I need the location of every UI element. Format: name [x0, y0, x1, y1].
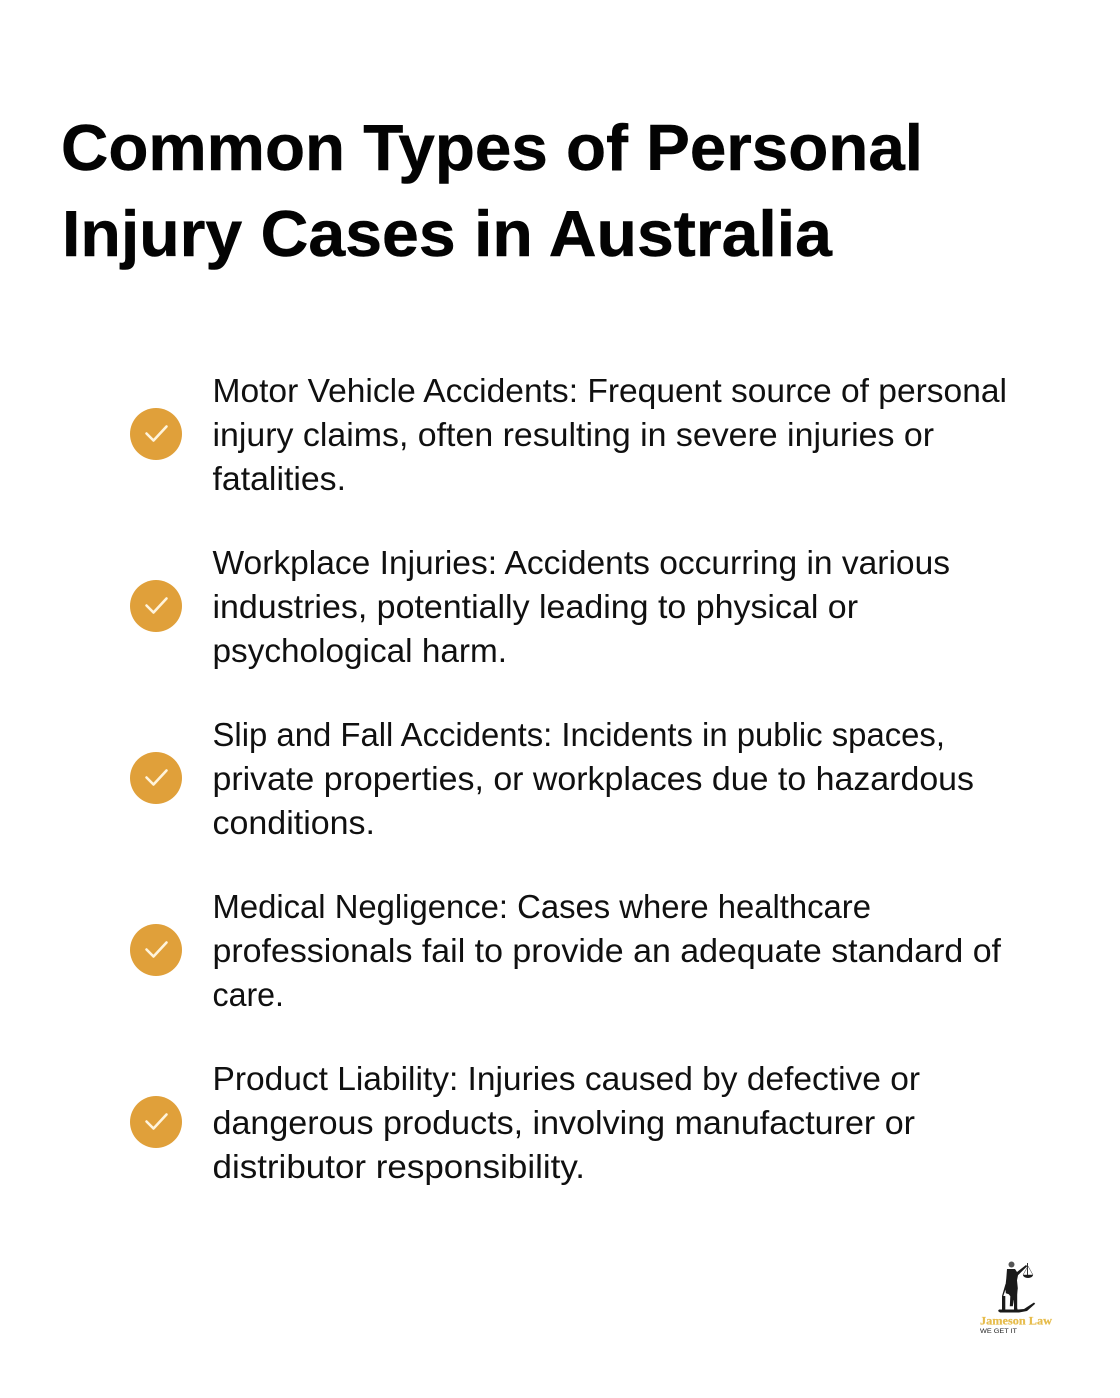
text: motor vehicle accidents: fatalities. — [212, 460, 346, 497]
text: brand name: Jameson Law — [980, 1316, 1053, 1328]
checklist item: workplace injuries — [130, 544, 950, 669]
text: motor vehicle accidents: injury claims, often resulting in severe injuries or — [212, 416, 934, 453]
text: tagline: WE GET IT — [980, 1328, 1017, 1335]
checklist item: product liability — [130, 1060, 920, 1185]
text: medical negligence: Medical Negligence: Cases where healthcare — [212, 888, 871, 925]
logo: Jameson Law — [980, 1262, 1053, 1335]
icon: check badge — [130, 580, 182, 632]
text: medical negligence: professionals fail to provide an adequate standard of — [212, 932, 1002, 969]
text: product liability — [212, 1060, 920, 1185]
icon: check badge — [130, 924, 182, 976]
checklist item: motor vehicle accidents — [130, 372, 1007, 497]
checklist item: medical negligence — [130, 888, 1002, 1013]
text: workplace injuries: psychological harm. — [212, 632, 507, 669]
icon: check badge — [130, 1096, 182, 1148]
text: slip and fall accidents: conditions. — [212, 804, 375, 841]
text: product liability: distributor responsibility. — [212, 1148, 585, 1185]
text: workplace injuries: Workplace Injuries: Accidents occurring in various — [212, 544, 950, 581]
text: motor vehicle accidents: Motor Vehicle Accidents: Frequent source of personal — [212, 372, 1007, 409]
text: medical negligence — [212, 888, 1002, 1013]
text: motor vehicle accidents — [212, 372, 1007, 497]
title: Injury Cases in Australia — [62, 197, 833, 270]
checklist item: slip and fall accidents — [130, 716, 974, 841]
text: workplace injuries — [212, 544, 950, 669]
text: medical negligence: care. — [212, 976, 284, 1013]
text: workplace injuries: industries, potentially leading to physical or — [212, 588, 858, 625]
text: product liability: dangerous products, involving manufacturer or — [212, 1104, 915, 1141]
icon: check badge — [130, 408, 182, 460]
icon: lady justice statue — [998, 1262, 1035, 1312]
text: slip and fall accidents — [212, 716, 974, 841]
text: product liability: Product Liability: Injuries caused by defective or — [212, 1060, 920, 1097]
title — [61, 111, 923, 270]
title: Common Types of Personal — [61, 111, 923, 184]
text: slip and fall accidents: Slip and Fall Accidents: Incidents in public spaces, — [212, 716, 945, 753]
text: slip and fall accidents: private properties, or workplaces due to hazardous — [212, 760, 974, 797]
icon: check badge — [130, 752, 182, 804]
